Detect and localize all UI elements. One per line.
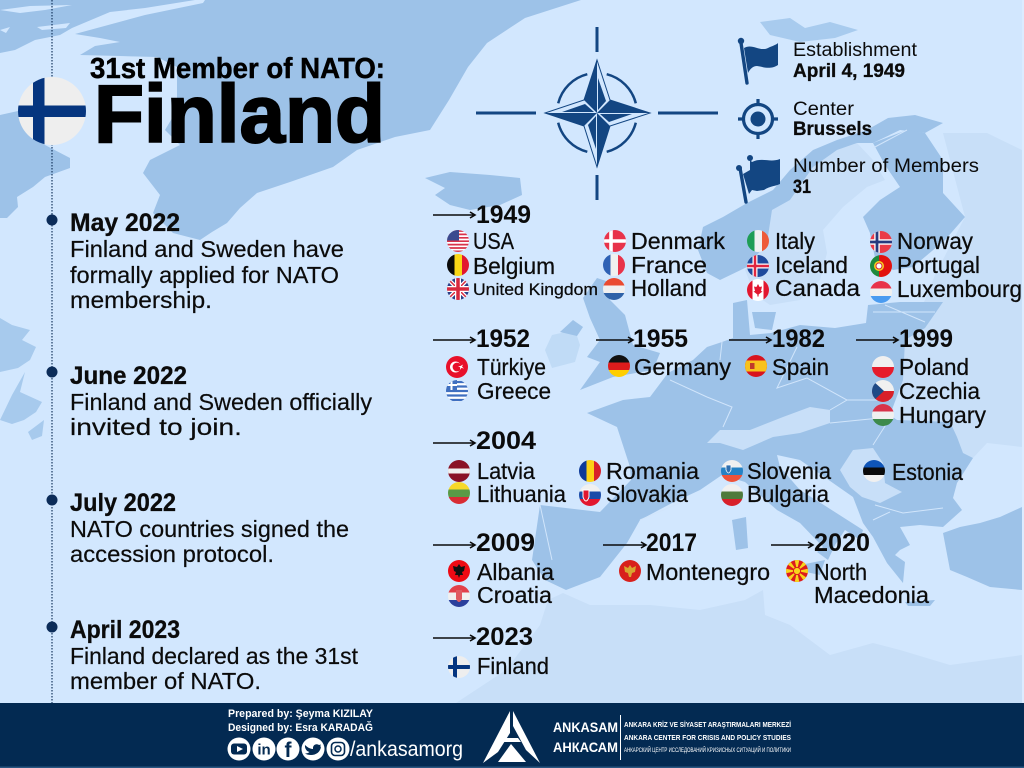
icon: YouTube [228, 738, 250, 760]
info: establishment: April 4, 1949 [793, 61, 905, 82]
country: Italy: Italy [775, 228, 815, 254]
country: Luxembourg [870, 280, 1021, 303]
title: Finland: Finland [94, 69, 385, 160]
icon: Facebook: f [284, 739, 292, 762]
country: USA [447, 230, 514, 252]
year 2023 with arrow: 2023 [476, 623, 533, 651]
year 2004 with arrow: 2004 [476, 427, 536, 455]
country: France: France [631, 252, 707, 278]
icon: ANKASAM logo [483, 711, 540, 763]
country: Holland: Holland [631, 275, 707, 301]
country: Czechia: Czechia [899, 378, 980, 404]
icon: Twitter [302, 738, 324, 760]
info: number of members: Number of Members [793, 156, 979, 177]
year 2023 with arrow [433, 623, 533, 651]
info: number of members: 31 [793, 177, 811, 198]
timeline: June 2022 [46, 362, 373, 440]
icon: LinkedIn: in [257, 742, 271, 758]
country: Denmark [604, 230, 726, 252]
country: Norway: Norway [897, 228, 973, 254]
country: Germany: Germany [634, 354, 732, 380]
info: establishment: Establishment [793, 40, 918, 61]
timeline: July 2022 [46, 489, 349, 567]
organisation names: ANKARA CENTER FOR CRISIS AND POLICY STUDIES [624, 733, 791, 742]
timeline: April 2023 [46, 616, 359, 694]
credits text: Designed by: Esra KARADAĞ [228, 721, 373, 734]
country: Czechia [872, 380, 980, 402]
timeline: June 2022: Finland and Sweden officially [70, 389, 373, 415]
country: Poland: Poland [899, 354, 969, 380]
year 1982 with arrow [729, 325, 825, 353]
timeline: April 2023: Finland declared as the 31st [70, 643, 359, 669]
year 1999 with arrow: 1999 [899, 325, 953, 353]
timeline: May 2022: May 2022 [70, 209, 180, 237]
country: Bulgaria: Bulgaria [747, 481, 829, 507]
country: Italy [747, 228, 815, 254]
country: Estonia: Estonia [892, 459, 963, 485]
country: Iceland: Iceland [775, 252, 848, 278]
info: center [738, 99, 872, 140]
year 2017 with arrow [603, 529, 697, 557]
organisation names: ANKASAM [553, 719, 618, 735]
country: North Macedonia [786, 560, 930, 604]
year 1955 with arrow [596, 325, 688, 353]
country: Spain: Spain [772, 354, 829, 380]
year 1955 with arrow: 1955 [633, 325, 688, 353]
icon: Instagram [326, 738, 350, 760]
year 1949 with arrow: 1949 [476, 201, 531, 229]
country: Latvia: Latvia [477, 458, 535, 484]
country: Albania: Albania [477, 559, 554, 585]
country: Greece [446, 380, 550, 402]
country: Albania [448, 560, 554, 582]
timeline: April 2023: member of NATO. [70, 668, 261, 694]
country: Portugal: Portugal [897, 252, 980, 278]
year 1999 with arrow [856, 325, 953, 353]
country: Slovenia [721, 460, 832, 482]
year 1982 with arrow: 1982 [772, 325, 825, 353]
year 2017 with arrow: 2017 [646, 529, 697, 557]
country: Slovenia: Slovenia [747, 458, 831, 484]
timeline: May 2022: formally applied for NATO [70, 262, 339, 288]
country: Portugal [870, 255, 979, 278]
year 2020 with arrow: 2020 [814, 529, 870, 557]
country: North Macedonia: Macedonia [814, 582, 929, 608]
country: Romania: Romania [606, 458, 699, 484]
country: Greece: Greece [477, 378, 551, 404]
timeline dotted line [51, 0, 53, 703]
country: Poland [872, 356, 968, 378]
country: Türkiye: Türkiye [477, 354, 546, 380]
timeline: April 2023: April 2023 [70, 616, 180, 644]
credits text: Prepared by: Şeyma KIZILAY [228, 708, 374, 720]
footer bar [0, 703, 1024, 768]
country: Canada [747, 278, 860, 301]
country: Belgium: Belgium [473, 253, 555, 279]
country: Luxembourg: Luxembourg [897, 276, 1022, 302]
country: United Kingdom: United Kingdom [473, 280, 598, 299]
credits text [228, 708, 374, 734]
icon: NATO compass emblem [476, 27, 718, 200]
icon: Facebook [276, 738, 300, 762]
info: establishment [738, 38, 918, 83]
country: Iceland [747, 255, 847, 277]
year 2020 with arrow [771, 529, 870, 557]
country: Finland [448, 656, 548, 678]
country: United Kingdom [447, 278, 598, 300]
info: center: Brussels [793, 119, 872, 140]
timeline: May 2022 [46, 209, 344, 313]
country: Estonia [863, 460, 964, 482]
timeline: May 2022: Finland and Sweden have [70, 236, 344, 262]
year 2009 with arrow [433, 529, 535, 557]
country: Türkiye [446, 354, 546, 380]
country: Slovakia: Slovakia [606, 481, 688, 507]
organisation names: АНКАСАМ [553, 739, 618, 755]
year 2004 with arrow [433, 427, 536, 455]
country: Croatia: Croatia [477, 582, 552, 608]
timeline: July 2022: accession protocol. [70, 541, 274, 567]
country: USA: USA [473, 228, 515, 254]
country: Hungary: Hungary [899, 402, 986, 428]
icon: LinkedIn [252, 738, 276, 760]
info: number of members [736, 155, 979, 202]
country: Finland: Finland [477, 653, 549, 679]
country: Lithuania [448, 482, 566, 504]
country: Holland [603, 278, 706, 300]
timeline: May 2022: membership. [70, 287, 212, 313]
country: Slovakia [579, 484, 688, 506]
year 2009 with arrow: 2009 [476, 529, 535, 557]
timeline: July 2022: NATO countries signed the [70, 516, 349, 542]
timeline: July 2022: July 2022 [70, 489, 176, 517]
timeline: June 2022: invited to join. [70, 414, 242, 440]
country: Lithuania: Lithuania [477, 481, 566, 507]
year 1952 with arrow: 1952 [476, 325, 530, 353]
timeline: June 2022: June 2022 [70, 362, 187, 390]
country: Denmark: Denmark [631, 228, 725, 254]
organisation names [553, 715, 791, 760]
country: Spain [745, 354, 829, 380]
info: center: Center [793, 99, 855, 120]
country: Latvia [448, 460, 536, 482]
country: France [603, 254, 706, 276]
country: Canada: Canada [775, 275, 860, 301]
country: Croatia [448, 585, 552, 607]
subtitle: 31st Member of NATO: [90, 53, 385, 85]
year 1952 with arrow [433, 325, 530, 353]
organisation names: ANKARA KRİZ VE SİYASET ARAŞTIRMALARI MERKEZİ [624, 720, 791, 729]
country: Norway [870, 231, 973, 254]
country: Montenegro: Montenegro [646, 559, 770, 585]
year 1949 with arrow [433, 201, 531, 229]
country: North Macedonia: North [814, 559, 867, 585]
organisation names: АНКАРСКИЙ ЦЕНТР ИССЛЕДОВАНИЙ КРИЗИСНЫХ СИТУАЦИЙ И ПОЛИТИКИ [624, 746, 791, 754]
country: Romania [579, 460, 700, 482]
social handle: /ankasamorg [350, 738, 463, 761]
icon: large Finland flag [18, 77, 86, 145]
